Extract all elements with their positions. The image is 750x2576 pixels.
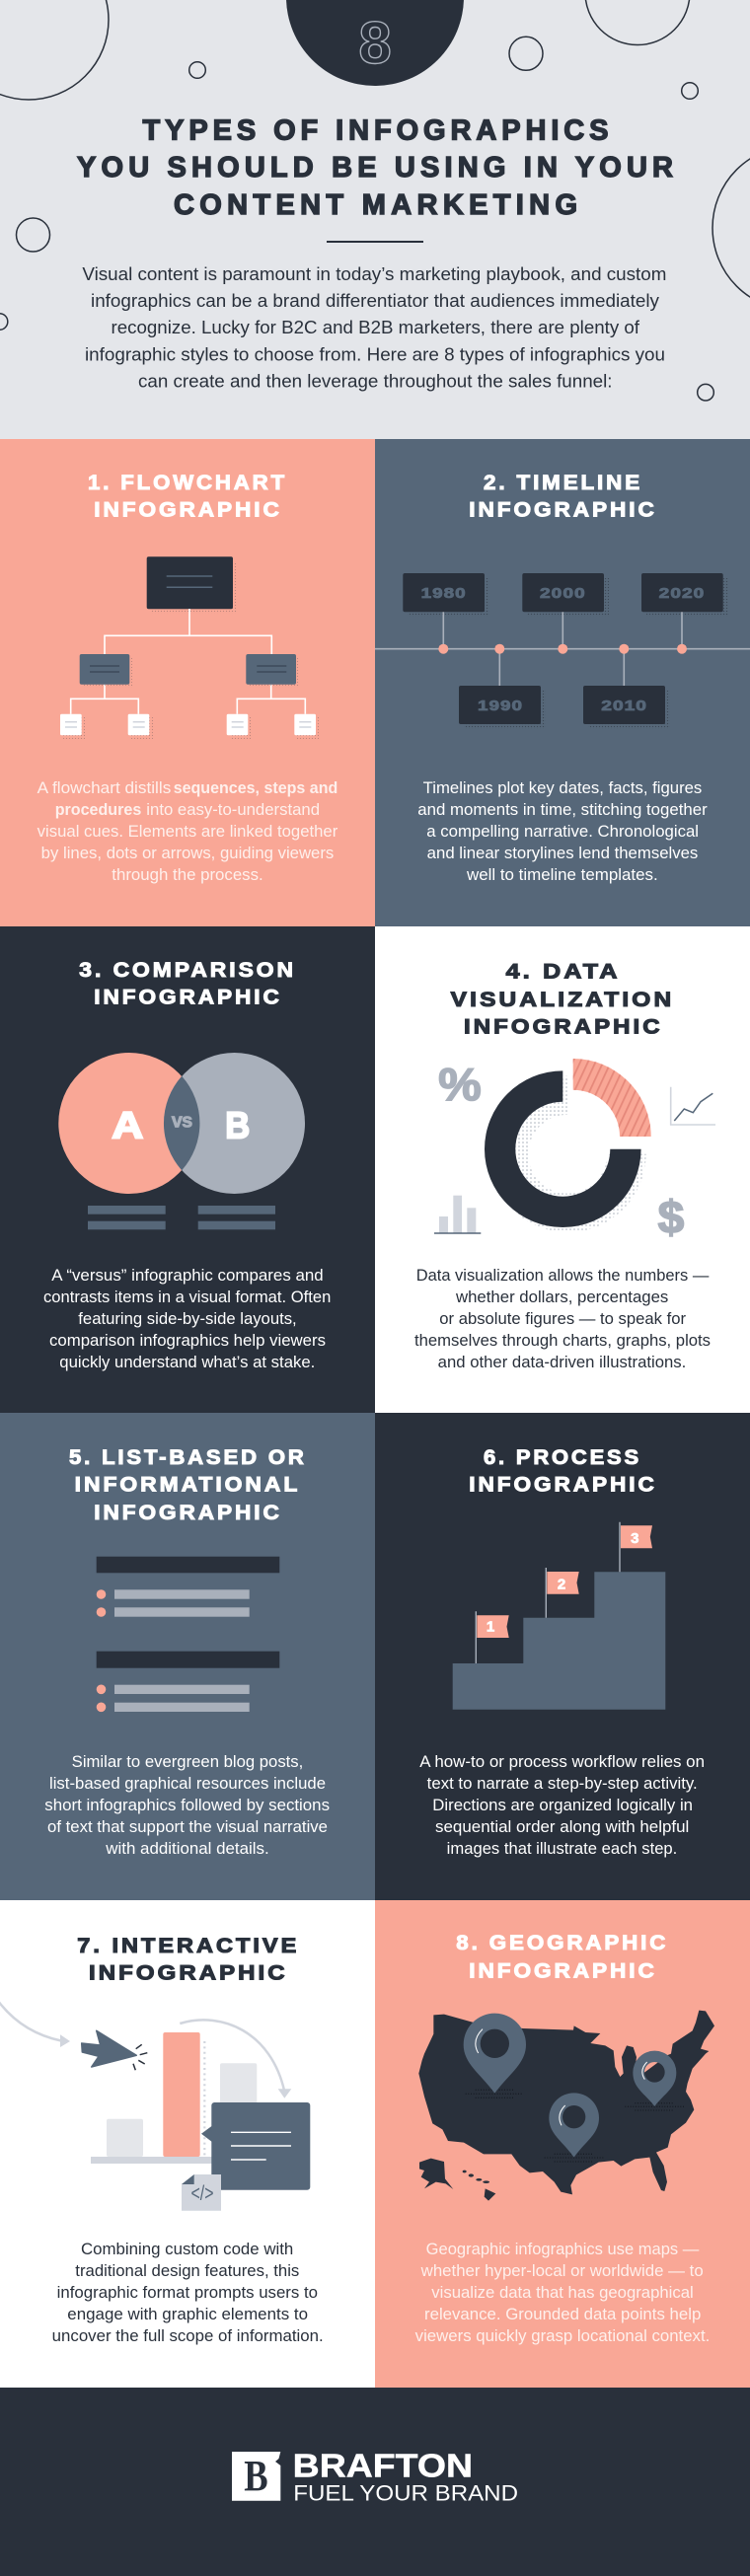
badge: number 8: 8 bbox=[358, 10, 392, 76]
body text: flowchart: sequences, steps and bbox=[174, 779, 338, 797]
logo: Brafton bbox=[232, 2448, 518, 2505]
body text: geographic: whether hyper-local or worldwide — to bbox=[420, 2262, 704, 2280]
body text: flowchart: A flowchart distills bbox=[38, 779, 171, 797]
body text: geographic: Geographic infographics use maps — bbox=[426, 2241, 700, 2258]
body text: flowchart: into easy-to-understand bbox=[146, 801, 320, 819]
panel: 4 data visualization bbox=[375, 926, 750, 1413]
heading: data visualization: INFOGRAPHIC bbox=[464, 1016, 663, 1039]
panel: 1 flowchart bbox=[0, 439, 375, 926]
body text: data visualization: whether dollars, percentages bbox=[455, 1288, 668, 1306]
heading: comparison bbox=[79, 959, 296, 1009]
body text: data visualization: themselves through charts, graphs, plots bbox=[414, 1332, 711, 1350]
logo: Brafton: FUEL YOUR BRAND bbox=[293, 2480, 518, 2505]
body text: flowchart: by lines, dots or arrows, guiding viewers bbox=[41, 845, 334, 862]
body text: flowchart: procedures bbox=[55, 801, 141, 819]
interactive illustration: </> bbox=[191, 2182, 213, 2205]
body text: list-based bbox=[44, 1753, 330, 1858]
body text: interactive: traditional design features, this bbox=[75, 2262, 299, 2280]
stairs with flags: 2 bbox=[558, 1576, 565, 1592]
panel: header bbox=[0, 0, 750, 439]
heading: interactive: 7. INTERACTIVE bbox=[77, 1935, 299, 1957]
body text: data visualization: Data visualization allows the numbers — bbox=[416, 1267, 710, 1285]
heading: process bbox=[469, 1446, 657, 1497]
heading: flowchart: 1. FLOWCHART bbox=[88, 472, 287, 494]
heading: data visualization: VISUALIZATION bbox=[451, 989, 674, 1011]
body text: comparison: quickly understand what’s at stake. bbox=[59, 1354, 315, 1371]
heading: comparison: INFOGRAPHIC bbox=[94, 987, 282, 1009]
body text: process bbox=[419, 1753, 705, 1858]
body text: geographic bbox=[415, 2241, 710, 2345]
body text: process: sequential order along with helpful bbox=[435, 1818, 689, 1836]
timeline diagram bbox=[375, 573, 750, 729]
body text: timeline: and moments in time, stitching together bbox=[417, 801, 708, 819]
title: TYPES OF INFOGRAPHICS bbox=[142, 115, 608, 147]
body text: geographic: viewers quickly grasp locational context. bbox=[415, 2327, 710, 2345]
intro text block bbox=[82, 264, 666, 392]
body text: timeline: a compelling narrative. Chronological bbox=[426, 823, 699, 841]
intro text block: Visual content is paramount in today’s marketing playbook, and custom bbox=[82, 264, 666, 284]
heading: geographic bbox=[456, 1932, 668, 1982]
body text: flowchart: visual cues. Elements are linked together bbox=[38, 823, 338, 841]
body text: interactive bbox=[52, 2241, 324, 2345]
heading: comparison: 3. COMPARISON bbox=[79, 959, 296, 982]
body text: geographic: relevance. Grounded data points help bbox=[424, 2306, 701, 2323]
heading: timeline: 2. TIMELINE bbox=[484, 472, 642, 494]
stairs with flags: 3 bbox=[631, 1530, 638, 1547]
body text: process: Directions are organized logically in bbox=[432, 1797, 693, 1814]
heading: data visualization bbox=[451, 961, 674, 1039]
venn diagram bbox=[58, 1053, 305, 1229]
body text: interactive: uncover the full scope of information. bbox=[52, 2327, 324, 2345]
map of the United States with pins bbox=[418, 2011, 714, 2201]
logo: Brafton: BRAFTON bbox=[293, 2448, 473, 2484]
venn diagram: vs bbox=[172, 1111, 192, 1133]
icon: bar chart bbox=[434, 1196, 481, 1233]
heading: interactive: INFOGRAPHIC bbox=[89, 1962, 288, 1985]
heading: interactive bbox=[77, 1935, 299, 1985]
timeline diagram: 1990 bbox=[478, 698, 523, 714]
body text: interactive: infographic format prompts users to bbox=[57, 2284, 318, 2302]
flowchart diagram bbox=[60, 556, 319, 739]
body text: timeline: well to timeline templates. bbox=[466, 866, 658, 884]
panel: 2 timeline bbox=[375, 439, 750, 926]
heading: flowchart: INFOGRAPHIC bbox=[94, 499, 282, 522]
heading: list-based bbox=[69, 1446, 307, 1524]
icon: percent: % bbox=[438, 1059, 482, 1110]
body text: geographic: visualize data that has geographical bbox=[431, 2284, 694, 2302]
body text: process: images that illustrate each step. bbox=[447, 1840, 677, 1858]
panel: 7 interactive bbox=[0, 1900, 375, 2388]
panel: 8 geographic bbox=[375, 1900, 750, 2388]
panel: 6 process bbox=[375, 1413, 750, 1900]
body text: comparison bbox=[43, 1267, 331, 1371]
logo: Brafton: B bbox=[244, 2452, 268, 2500]
body text: list-based: of text that support the visual narrative bbox=[47, 1818, 328, 1836]
body text: flowchart: through the process. bbox=[112, 866, 263, 884]
intro text block: can create and then leverage throughout the sales funnel: bbox=[138, 372, 612, 392]
heading: timeline: INFOGRAPHIC bbox=[469, 499, 657, 522]
timeline diagram: 2020 bbox=[659, 585, 705, 602]
body text: interactive: engage with graphic elements to bbox=[67, 2306, 308, 2323]
heading: list-based: INFORMATIONAL bbox=[75, 1474, 300, 1497]
intro text block: recognize. Lucky for B2C and B2B marketers, there are plenty of bbox=[111, 318, 640, 337]
list diagram bbox=[97, 1557, 279, 1712]
heading: process: INFOGRAPHIC bbox=[469, 1474, 657, 1497]
heading: list-based: 5. LIST-BASED OR bbox=[69, 1446, 307, 1469]
decorative outline circles bbox=[0, 0, 750, 401]
icon: line chart bbox=[671, 1087, 715, 1125]
title: CONTENT MARKETING bbox=[174, 189, 577, 221]
heading: geographic: INFOGRAPHIC bbox=[469, 1959, 657, 1982]
stairs with flags bbox=[453, 1522, 665, 1710]
venn diagram: A bbox=[112, 1105, 143, 1146]
title bbox=[77, 115, 673, 221]
body text: comparison: A “versus” infographic compares and bbox=[51, 1267, 324, 1285]
body text: timeline: and linear storylines lend themselves bbox=[427, 845, 698, 862]
title: YOU SHOULD BE USING IN YOUR bbox=[77, 152, 673, 184]
body text: process: text to narrate a step-by-step activity. bbox=[427, 1775, 698, 1793]
body text: interactive: Combining custom code with bbox=[81, 2241, 293, 2258]
badge: number 8 bbox=[286, 0, 464, 86]
timeline diagram: 2010 bbox=[601, 698, 647, 714]
body text: data visualization: or absolute figures — to speak for bbox=[439, 1310, 686, 1328]
donut chart bbox=[485, 1059, 651, 1232]
footer bbox=[0, 2388, 750, 2576]
venn diagram: B bbox=[225, 1105, 250, 1146]
panel: 5 list-based bbox=[0, 1413, 375, 1900]
body text: process: A how-to or process workflow relies on bbox=[419, 1753, 705, 1771]
body text: comparison: comparison infographics help viewers bbox=[49, 1332, 326, 1350]
body text: list-based: with additional details. bbox=[105, 1840, 269, 1858]
timeline diagram: 2000 bbox=[540, 585, 586, 602]
body text: data visualization bbox=[414, 1267, 711, 1371]
timeline diagram: 1980 bbox=[421, 585, 467, 602]
heading: process: 6. PROCESS bbox=[484, 1446, 641, 1469]
heading: list-based: INFOGRAPHIC bbox=[94, 1502, 282, 1524]
heading: geographic: 8. GEOGRAPHIC bbox=[456, 1932, 668, 1954]
interactive illustration bbox=[0, 2001, 310, 2211]
intro text block: infographic styles to choose from. Here are 8 types of infographics you bbox=[85, 345, 665, 365]
body text: timeline: Timelines plot key dates, facts, figures bbox=[423, 779, 702, 797]
body text: comparison: featuring side-by-side layouts, bbox=[78, 1310, 297, 1328]
body text: data visualization: and other data-driven illustrations. bbox=[438, 1354, 686, 1371]
body text: timeline bbox=[417, 779, 708, 884]
body text: list-based: Similar to evergreen blog posts, bbox=[72, 1753, 303, 1771]
icon: dollar: $ bbox=[658, 1192, 684, 1243]
heading: data visualization: 4. DATA bbox=[506, 961, 621, 984]
body text: comparison: contrasts items in a visual format. Often bbox=[43, 1288, 331, 1306]
stairs with flags: 1 bbox=[487, 1619, 494, 1636]
body text: list-based: list-based graphical resources include bbox=[49, 1775, 326, 1793]
panel: 3 comparison bbox=[0, 926, 375, 1413]
heading: flowchart bbox=[88, 472, 287, 522]
body text: list-based: short infographics followed by sections bbox=[44, 1797, 330, 1814]
intro text block: infographics can be a brand differentiator that audiences immediately bbox=[91, 291, 659, 311]
heading: timeline bbox=[469, 472, 657, 522]
body text: flowchart bbox=[38, 779, 338, 884]
